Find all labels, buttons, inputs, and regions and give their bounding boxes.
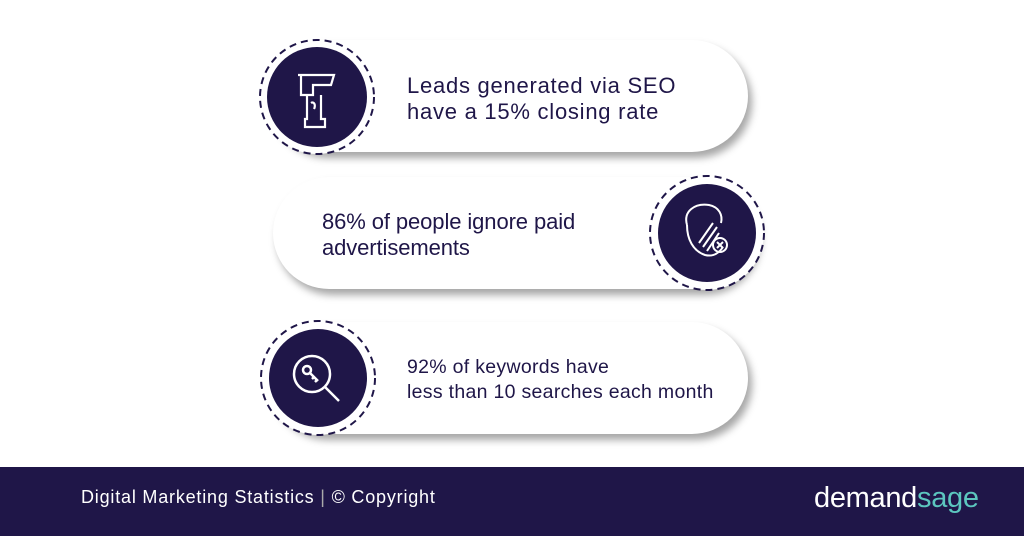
text: stat 2: advertisements xyxy=(322,235,470,260)
footer bar xyxy=(0,467,1024,536)
panel: stat 1 xyxy=(268,40,748,152)
icon: hand circle xyxy=(259,39,375,155)
icon: face hand circle xyxy=(649,175,765,291)
text: stat 1 xyxy=(407,73,676,124)
text: stat 1: have a 15% closing rate xyxy=(407,99,659,124)
footer text: Digital Marketing Statistics | © Copyright xyxy=(81,487,436,507)
panel: stat 3 xyxy=(268,322,748,434)
text: stat 3: less than 10 searches each month xyxy=(407,381,714,403)
text: stat 3: 92% of keywords have xyxy=(407,356,609,378)
text: stat 2 xyxy=(322,209,575,260)
panel: stat 2 xyxy=(273,177,757,289)
text: stat 2: 86% of people ignore paid xyxy=(322,209,575,234)
icon: key search circle xyxy=(260,320,376,436)
text: stat 1: Leads generated via SEO xyxy=(407,73,676,98)
logo: demandsage: demandsage xyxy=(814,482,979,514)
text: stat 3 xyxy=(407,356,714,403)
